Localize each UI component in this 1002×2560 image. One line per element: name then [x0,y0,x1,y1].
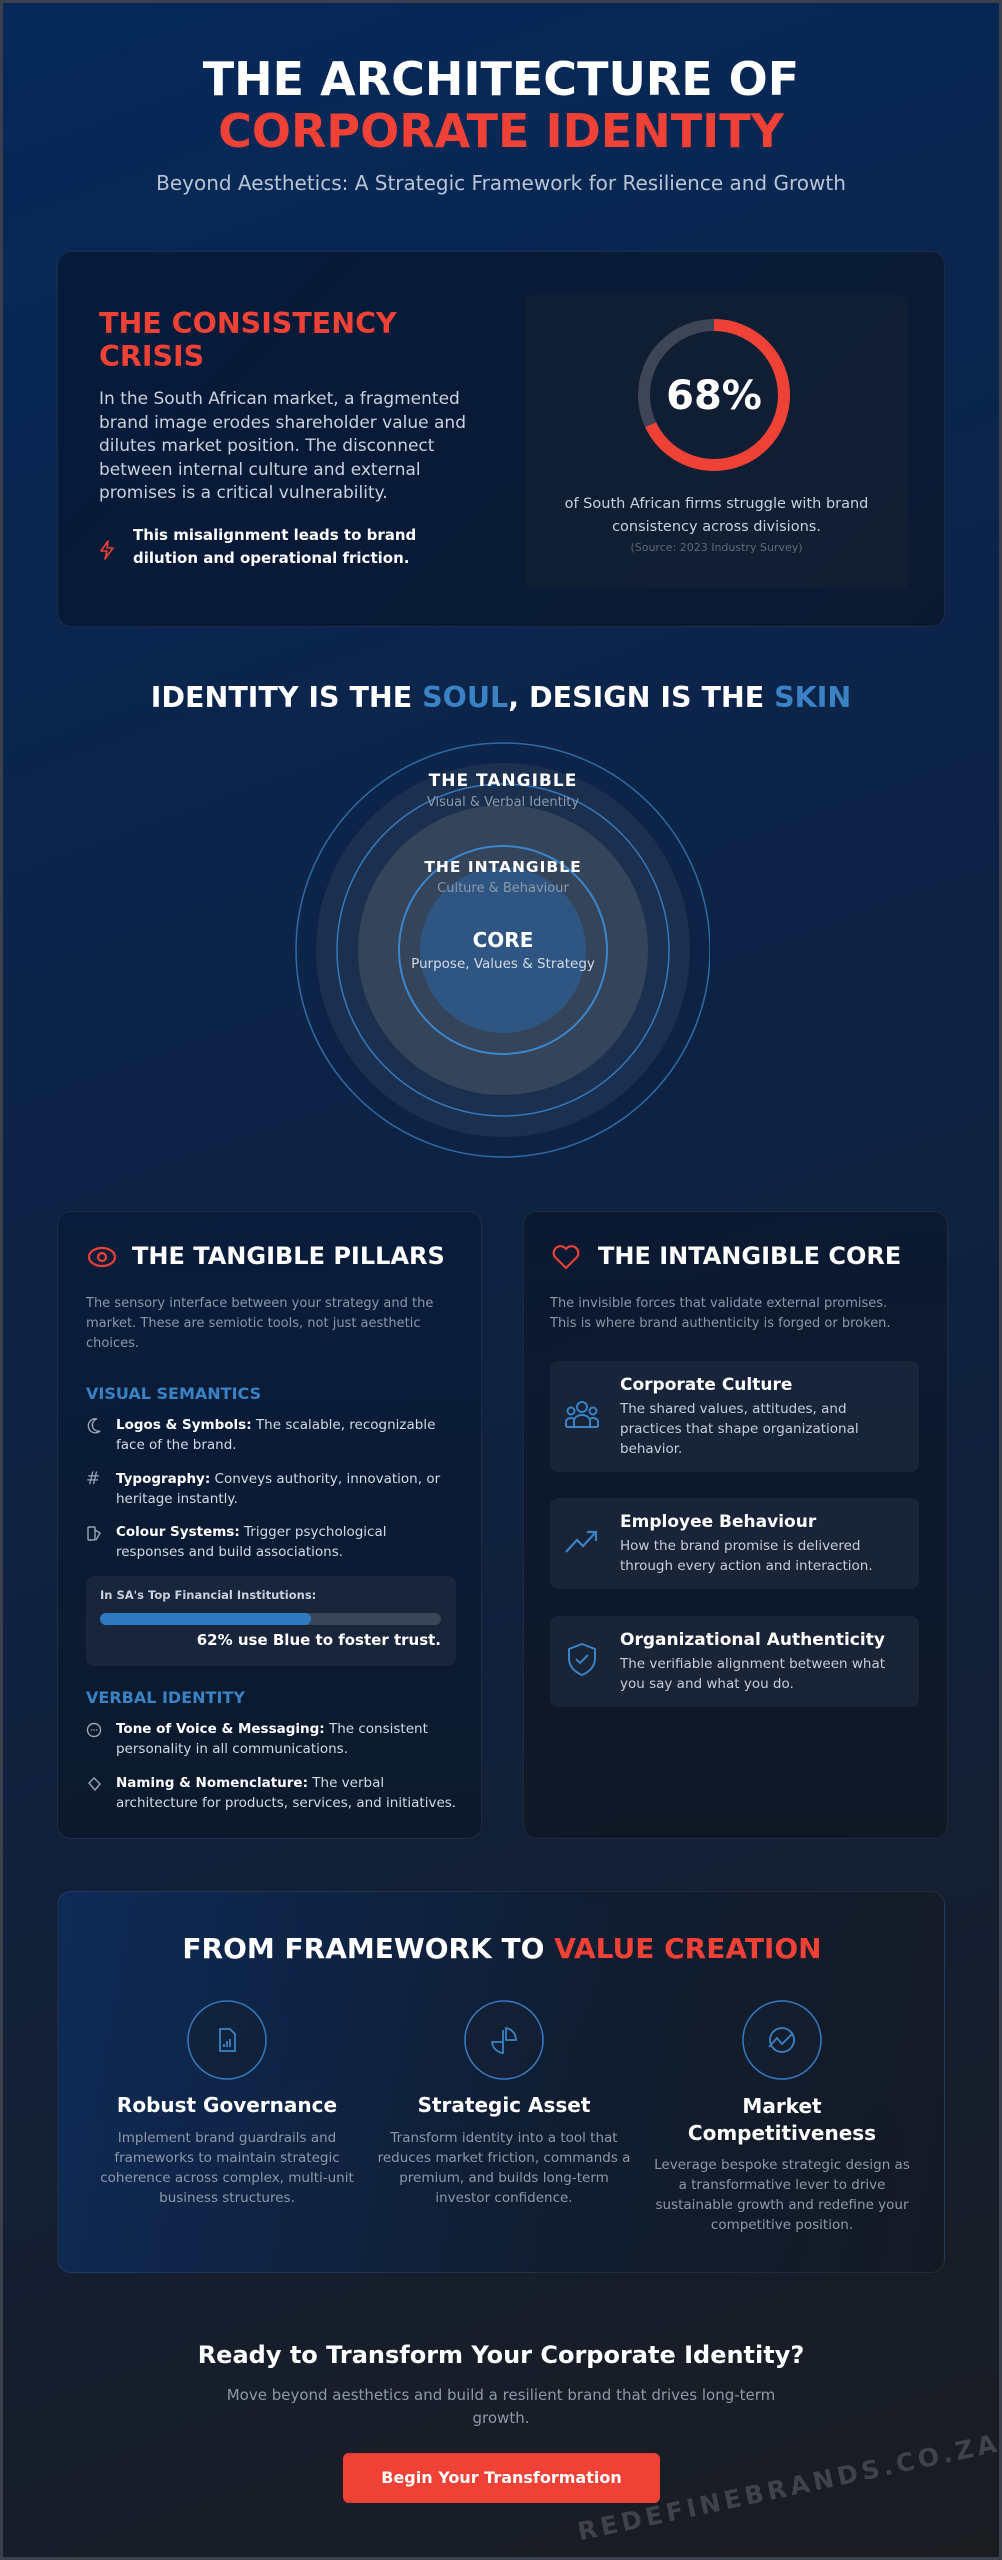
title: CORPORATE IDENTITY [218,104,784,158]
icon: growth chart [742,2000,822,2080]
heading: consistency crisis: THE CONSISTENCY [99,307,397,340]
panel: tangible pillars [57,1211,482,1839]
panel: value creation [57,1891,945,2273]
list: verbal items: Naming & Nomenclature: The verbal architecture for products, services, and initiatives. [116,1775,456,1811]
chart: concentric identity model [295,742,710,1158]
heading: intangible core: THE INTANGIBLE CORE [598,1242,901,1270]
panel: consistency crisis [57,251,945,627]
panel: tangible pillars: # [86,1469,100,1489]
text block: pillars intro: The sensory interface between your strategy and the market. These are semiotic tools, not just aesthetic choices. [86,1296,433,1351]
column: robust governance: Robust Governance [117,2093,337,2117]
title [202,52,799,158]
panel: statistic: (Source: 2023 Industry Survey) [630,541,803,554]
callout: misalignment: dilution and operational friction. [133,549,409,567]
panel: statistic [525,295,908,588]
heading: tangible pillars: THE TANGIBLE PILLARS [132,1242,445,1270]
text block: cta subtext: Move beyond aesthetics and build a resilient brand that drives long-term growth. [227,2386,775,2427]
column: robust governance: Implement brand guardrails and frameworks to maintain strategic coherence across complex, multi-unit business structures. [100,2130,354,2206]
chart: blue usage bar: 62% use Blue to foster trust. [197,1631,441,1649]
card: employee behaviour: How the brand promise is delivered through every action and interaction. [620,1538,873,1574]
list: visual items: Logos & Symbols: The scalable, recognizable face of the brand. [116,1417,435,1453]
heading: call to action: Ready to Transform Your Corporate Identity? [198,2341,804,2369]
column: market competitiveness: Market [742,2094,822,2118]
heading: value creation: FROM FRAMEWORK TO VALUE CREATION [182,1932,822,1965]
chart: 68% donut: 68% [666,373,762,419]
text block: stat caption: of South African firms struggle with brand [565,496,868,512]
callout: misalignment [100,526,416,567]
column: market competitiveness: Leverage bespoke strategic design as a transformative lever to drive sustainable growth and redefine your competitive position. [654,2157,910,2233]
column: market competitiveness [654,2000,910,2233]
card: employee behaviour [550,1498,919,1589]
list: visual items: Typography: Conveys authority, innovation, or heritage instantly. [116,1471,440,1507]
text block: stat caption: consistency across divisions. [612,519,821,535]
chart: concentric identity model: Visual & Verbal Identity [427,795,579,810]
chart: concentric identity model: Purpose, Values & Strategy [411,956,595,972]
text block: crisis paragraph: In the South African market, a fragmented brand image erodes shareholder value and dilutes market position. The disconnect between internal culture and external promises is a critical vulnerability. [99,389,466,503]
list: verbal items: Tone of Voice & Messaging: The consistent personality in all communications. [116,1721,428,1757]
watermark: REDEFINEBRANDS.CO.ZA [575,2428,1002,2546]
card: employee behaviour: Employee Behaviour [620,1512,816,1532]
text block: core intro: The invisible forces that validate external promises. This is where brand authenticity is forged or broken. [550,1296,891,1331]
column: robust governance [100,2000,354,2206]
icon: heart [552,1245,580,1270]
chart: concentric identity model: THE INTANGIBLE [424,858,582,876]
column: strategic asset [378,2000,630,2206]
list: verbal items [86,1721,456,1811]
title: THE ARCHITECTURE OF [203,52,799,106]
card: corporate culture: The shared values, attitudes, and practices that shape organizational behavior. [620,1401,859,1457]
subtitle: Beyond Aesthetics: A Strategic Framework for Resilience and Growth [156,171,846,195]
heading: consistency crisis [99,307,397,373]
button: begin transformation: Begin Your Transformation [381,2468,622,2487]
chart: blue usage bar: In SA's Top Financial Institutions: [100,1588,316,1602]
icon: governance document [187,2000,267,2080]
chart: blue usage bar [86,1576,456,1666]
column: strategic asset: Transform identity into a tool that reduces market friction, commands a premium, and builds long-term investor confidence. [378,2130,630,2206]
list: visual items: Colour Systems: Trigger psychological responses and build associations. [116,1524,386,1560]
chart: 68% donut [638,319,790,471]
heading: consistency crisis: CRISIS [99,340,204,373]
card: corporate culture [550,1361,919,1472]
chart: concentric identity model: CORE [473,928,533,952]
card: corporate culture: Corporate Culture [620,1375,792,1395]
card: organizational authenticity: Organizational Authenticity [620,1630,885,1650]
chart: concentric identity model: Culture & Behaviour [437,881,569,896]
card: organizational authenticity: The verifiable alignment between what you say and what you do. [620,1656,885,1692]
button: begin transformation [343,2453,660,2503]
column: strategic asset: Strategic Asset [418,2093,590,2117]
panel: intangible core [523,1211,948,1839]
heading: verbal identity: VERBAL IDENTITY [86,1688,245,1707]
text block: stat caption [565,496,868,535]
icon: pie chart [464,2000,544,2080]
callout: misalignment: This misalignment leads to brand [133,526,416,544]
list: visual items [86,1417,440,1560]
column: market competitiveness: Competitiveness [688,2121,876,2145]
heading: visual semantics: VISUAL SEMANTICS [86,1384,261,1403]
card: organizational authenticity [550,1616,919,1707]
icon: eye [88,1246,116,1268]
icon: lightning [100,540,114,560]
chart: concentric identity model: THE TANGIBLE [429,771,577,791]
heading: identity soul skin: IDENTITY IS THE SOUL, DESIGN IS THE SKIN [151,681,851,714]
